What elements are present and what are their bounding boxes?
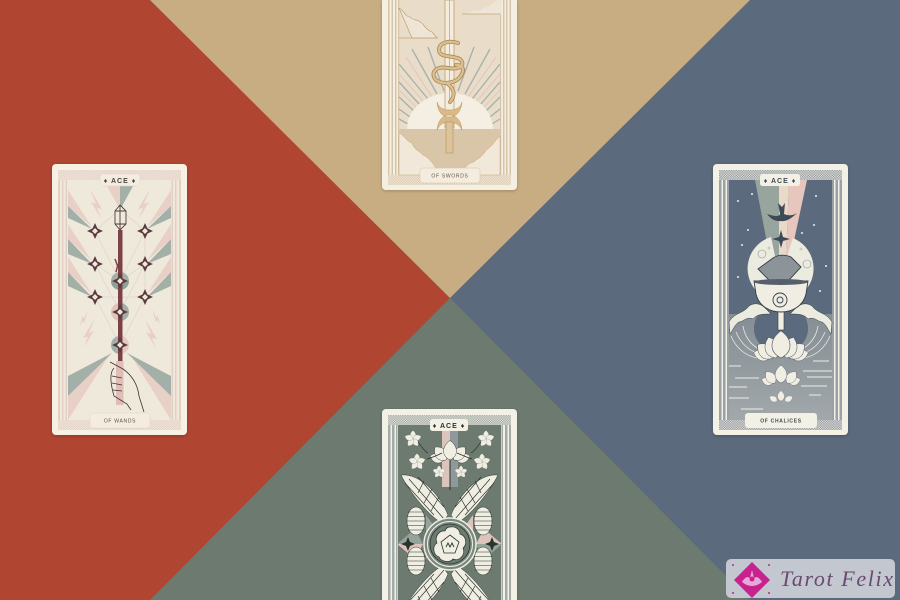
label: ace [100,174,140,186]
label: of swords [420,168,480,183]
water waves [729,304,832,358]
logo: tarot felix badge [726,559,895,598]
medallions [111,272,129,354]
label: of swords: OF SWORDS [431,173,469,179]
label: ace [430,419,468,431]
label: of chalices: OF CHALICES [760,418,802,424]
label: ace: ♦ ACE ♦ [433,423,465,430]
central lotus and stem [429,440,471,490]
panel: ace of swords card [382,0,517,190]
side feathers [407,507,492,575]
night sky and water [729,180,832,420]
moon [748,237,814,302]
label: ace: ♦ ACE ♦ [764,178,796,185]
side flowers [404,430,495,478]
lower wings [409,568,490,600]
vines [418,442,481,459]
chalice [754,279,808,330]
label: ace: ♦ ACE ♦ [104,178,136,185]
rays [68,186,171,420]
snake [434,42,463,102]
lotus large [752,331,810,363]
shell [758,255,801,280]
stars in sky [737,193,827,292]
panel: ace of pentacles card [382,409,517,600]
lightning bolts [75,189,165,348]
brand name: Tarot Felix [780,566,893,591]
upper wings [401,475,498,523]
label: of chalices [745,413,817,428]
panel: ace of wands card [52,164,187,435]
sunbeams [399,47,500,124]
icon: magenta lotus diamond [732,562,770,598]
wand [115,205,126,405]
label: of wands [90,413,150,428]
label: ace [760,174,800,186]
central coin [424,518,476,570]
upper clouds [399,0,501,38]
panel: ace of chalices card [713,164,848,435]
sun and sea [399,93,500,175]
lotus small [768,391,794,403]
stars [87,223,153,353]
dove and star [767,203,797,248]
sword [437,0,462,153]
water ripples [729,361,832,409]
label: of wands: OF WANDS [104,418,136,424]
light beam [755,180,807,264]
lotus medium [760,365,802,387]
hand [110,362,144,412]
side stars [401,537,499,551]
construction lines [95,209,145,345]
pastel background shapes [397,425,502,559]
